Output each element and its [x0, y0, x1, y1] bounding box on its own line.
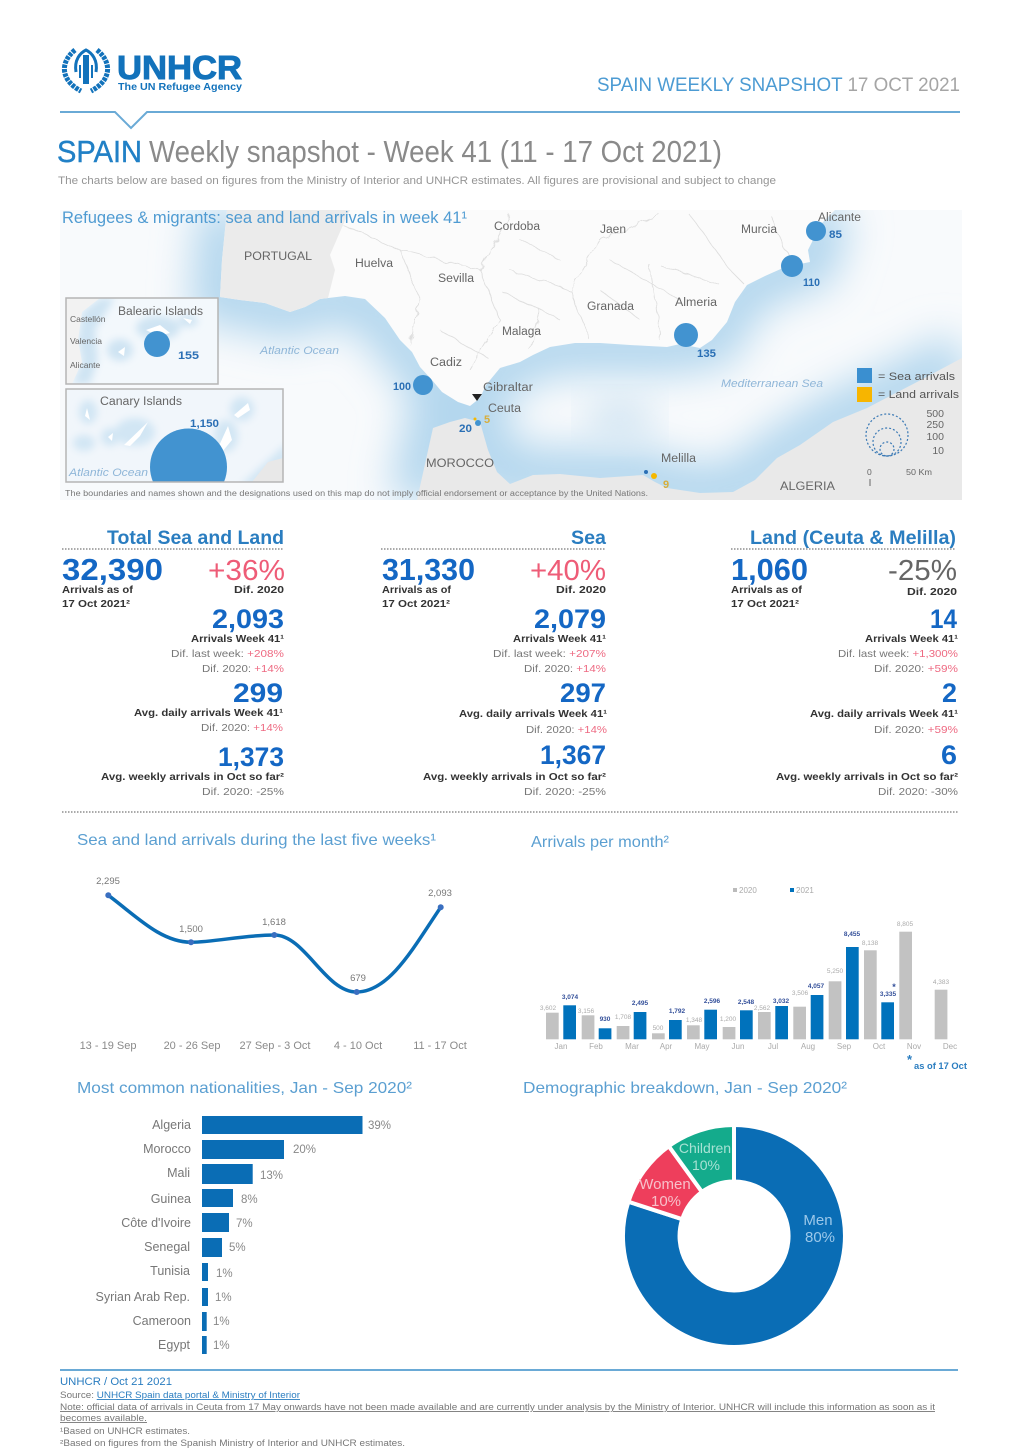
bubble: Canary Islands — [150, 428, 227, 482]
panel: total sea and land — [62, 528, 285, 798]
heading: total: Total Sea and Land — [107, 528, 284, 549]
map labels: ALGERIA — [780, 481, 835, 493]
map labels: PORTUGAL — [244, 251, 313, 263]
values 2021: 3,074 — [562, 994, 579, 1001]
note: as of 17 Oct: * — [907, 1052, 913, 1067]
North Africa land — [417, 358, 962, 500]
donut segment: children: Children — [679, 1140, 731, 1156]
horizontal bars — [202, 1116, 362, 1354]
line axis labels: 13 - 19 Sep — [80, 1040, 136, 1052]
panel: total sea and land: Dif. 2020: +14% — [201, 722, 283, 734]
map labels: Sevilla — [438, 273, 475, 285]
panel: sea: Dif. last week: +207% — [493, 648, 606, 660]
panel: total sea and land: Arrivals Week 41¹ — [191, 633, 285, 645]
month labels: Aug — [801, 1042, 815, 1051]
stat: land difference: -25% — [888, 555, 957, 587]
map labels: Malaga — [502, 326, 542, 338]
stat: land daily average: 2 — [942, 678, 957, 708]
country labels: Algeria — [152, 1118, 191, 1132]
values 2020: 500 — [653, 1025, 664, 1032]
inset: Balearic Islands: Valencia — [70, 336, 102, 346]
map labels: Murcia — [741, 224, 778, 236]
values 2021: 2,596 — [704, 998, 721, 1005]
month labels: Jun — [732, 1042, 744, 1051]
panel: land: Avg. daily arrivals Week 41¹ — [810, 708, 959, 720]
map scale — [867, 469, 932, 486]
header label: SPAIN WEEKLY SNAPSHOT 17 OCT 2021 — [597, 75, 960, 96]
inset: Canary Islands: Atlantic Ocean — [68, 467, 148, 479]
month labels: May — [694, 1042, 710, 1051]
donut segment: children — [669, 1125, 734, 1192]
footer notes: becomes available. — [60, 1413, 147, 1423]
country labels — [96, 1118, 191, 1352]
heading: demographics: Demographic breakdown, Jan - Sep 2020² — [523, 1080, 848, 1097]
panel: land — [731, 528, 959, 798]
bubble: Balearic — [144, 331, 170, 357]
donut segment: men: Men — [803, 1212, 833, 1229]
values 2021 — [562, 931, 897, 1023]
panel: demographic donut — [523, 1080, 848, 1347]
icon: UNHCR emblem — [64, 50, 108, 91]
map legend: 10 — [932, 445, 944, 457]
month labels: Apr — [660, 1042, 673, 1051]
stat: sea daily average: 297 — [560, 678, 606, 708]
stat: land week arrivals: 14 — [930, 604, 957, 634]
panel: sea: Avg. weekly arrivals in Oct so far² — [423, 771, 607, 783]
values 2020 — [540, 921, 950, 1032]
panel: total sea and land: Dif. 2020 — [234, 584, 284, 596]
line value labels: 2,093 — [428, 888, 452, 899]
map legend: = Land arrivals — [878, 389, 960, 401]
panel: sea: Arrivals Week 41¹ — [513, 633, 607, 645]
panel: total sea and land: Dif. 2020: -25% — [202, 786, 284, 798]
map labels: Granada — [587, 301, 635, 313]
panel: land: Dif. 2020 — [907, 586, 957, 598]
values 2021: 1,792 — [669, 1008, 686, 1015]
line value labels: 1,618 — [262, 917, 286, 928]
donut segment: children: 10% — [692, 1157, 720, 1173]
bubbles on mainland — [393, 221, 842, 491]
header logo: UNHCR — [64, 49, 242, 93]
month labels: Jan — [555, 1042, 567, 1051]
values 2021: 2,495 — [632, 1000, 649, 1007]
panel: sea: Dif. 2020: -25% — [524, 786, 606, 798]
map scale: 50 Km — [906, 467, 932, 477]
map legend: = Sea arrivals — [878, 371, 956, 383]
percentage labels — [213, 1120, 391, 1352]
heading: per month: Arrivals per month² — [531, 834, 670, 851]
line value labels: 2,295 — [96, 876, 120, 887]
map labels: Melilla — [661, 453, 697, 465]
panel: sea: Dif. 2020: +14% — [526, 724, 607, 736]
values 2021: 930 — [600, 1016, 611, 1023]
inset: Balearic Islands — [66, 298, 218, 384]
donut segment: men: 80% — [805, 1229, 835, 1246]
country labels: Mali — [167, 1166, 190, 1180]
panel: sea: Dif. 2020: +14% — [524, 663, 606, 675]
footer credit: UNHCR / Oct 21 2021 — [60, 1376, 172, 1388]
panel: land: 17 Oct 2021² — [731, 598, 800, 610]
inset: Balearic Islands: Castellón — [70, 314, 106, 324]
footnote 1: ¹Based on UNHCR estimates. — [60, 1426, 190, 1436]
logo tagline: The UN Refugee Agency — [118, 81, 242, 93]
map labels: Huelva — [355, 258, 394, 270]
inset: Canary Islands: Canary Islands — [100, 396, 182, 408]
map disclaimer: The boundaries and names shown and the designations used on this map do not imply official endorsement or acceptance by the United Nations. — [65, 489, 648, 498]
percentage labels: 1% — [213, 1316, 230, 1328]
map heading: Refugees & migrants: sea and land arrivals in week 41¹ — [62, 209, 467, 227]
bars 2020 — [546, 932, 947, 1039]
percentage labels: 13% — [260, 1170, 283, 1182]
inset: Balearic Islands: Alicante — [70, 360, 101, 370]
map labels: Atlantic Ocean — [259, 345, 339, 357]
donut segment: men — [623, 1125, 845, 1347]
donut segment: women: 10% — [651, 1193, 681, 1210]
values 2021: 3,335 — [880, 991, 897, 998]
title: SPAIN — [57, 134, 142, 169]
inset: Canary Islands: 1,150 — [190, 418, 219, 430]
stat: total daily average: 299 — [233, 678, 283, 708]
heading: five weeks: Sea and land arrivals during the last five weeks¹ — [77, 832, 436, 849]
map labels: MOROCCO — [426, 458, 494, 470]
country labels: Morocco — [143, 1142, 191, 1156]
country labels: Senegal — [144, 1240, 190, 1254]
values 2021: * — [892, 982, 896, 992]
panel: total sea and land: Avg. weekly arrivals in Oct so far² — [101, 771, 285, 783]
panel: total sea and land: 17 Oct 2021² — [62, 598, 131, 610]
stat: total difference: +36% — [208, 555, 285, 587]
map labels: Cordoba — [494, 221, 541, 233]
values 2021: 4,057 — [808, 983, 825, 990]
values 2020: 1,200 — [720, 1016, 737, 1023]
panel: land: Avg. weekly arrivals in Oct so far² — [776, 771, 959, 783]
panel: nationalities bar chart — [77, 1080, 413, 1354]
logo wordmark: UNHCR — [117, 49, 242, 86]
header rule with notch — [60, 112, 960, 128]
bars 2021 — [563, 947, 894, 1039]
panel: total sea and land: Dif. last week: +208% — [171, 648, 284, 660]
values 2020: 5,250 — [827, 968, 844, 975]
values 2020: 1,708 — [615, 1014, 632, 1021]
panel: total sea and land: Arrivals as of — [62, 584, 134, 596]
month labels: Sep — [837, 1042, 852, 1051]
percentage labels: 1% — [213, 1340, 230, 1352]
month labels: Jul — [768, 1042, 778, 1051]
month labels: Feb — [589, 1042, 603, 1051]
map labels: Alicante — [818, 212, 861, 224]
panel: land: Dif. 2020: -30% — [878, 786, 958, 798]
map labels: Gibraltar — [483, 382, 533, 394]
note: as of 17 Oct — [907, 1052, 967, 1071]
panel: five week line chart — [77, 832, 467, 1052]
footnote 2: ²Based on figures from the Spanish Ministry of Interior and UNHCR estimates. — [60, 1438, 405, 1448]
panel: total sea and land: Dif. 2020: +14% — [202, 663, 284, 675]
map scale: 0 — [867, 467, 872, 477]
percentage labels: 39% — [368, 1120, 391, 1132]
footer notes — [60, 1376, 936, 1448]
map labels: Mediterranean Sea — [721, 378, 823, 390]
percentage labels: 7% — [236, 1218, 253, 1230]
line axis labels: 20 - 26 Sep — [164, 1040, 220, 1052]
percentage labels: 8% — [241, 1194, 258, 1206]
heading: sea: Sea — [571, 528, 606, 549]
heading: nationalities: Most common nationalities, Jan - Sep 2020² — [77, 1080, 413, 1097]
values 2020: 3,156 — [578, 1008, 595, 1015]
map labels: Almeria — [675, 297, 718, 309]
values 2020: 8,805 — [897, 921, 914, 928]
panel: land: Dif. 2020: +59% — [874, 663, 958, 675]
Portugal land — [220, 210, 350, 312]
month legend: 2020 — [739, 886, 757, 895]
values 2020: 1,348 — [686, 1017, 703, 1024]
line value labels: 679 — [350, 973, 366, 984]
panel: sea: Dif. 2020 — [556, 584, 606, 596]
values 2020: 3,602 — [540, 1005, 557, 1012]
footer note: Note: official data of arrivals in Ceuta from 17 May onwards have not been made available and are currently under analysis by the Ministry of Interior. UNHCR will include this information as soon as it — [60, 1402, 936, 1412]
bubbles on mainland: 85 — [829, 229, 842, 241]
values 2020: 4,383 — [933, 979, 950, 986]
map legend: 100 — [926, 431, 944, 443]
month labels: Nov — [907, 1042, 921, 1051]
stat: sea week arrivals: 2,079 — [534, 604, 606, 634]
bubbles on mainland: 100 — [393, 381, 411, 393]
panel: sea: Arrivals as of — [382, 584, 452, 596]
stat: total arrivals: 32,390 — [62, 552, 163, 587]
map labels — [244, 212, 861, 493]
bubbles on mainland: 5 — [484, 414, 490, 426]
map labels: Ceuta — [488, 403, 522, 415]
stat: total weekly average: 1,373 — [218, 742, 284, 772]
bubbles on mainland: 135 — [697, 348, 716, 360]
inset: Balearic Islands: Balearic Islands — [118, 306, 203, 318]
month labels: Oct — [873, 1042, 886, 1051]
country labels: Syrian Arab Rep. — [96, 1290, 190, 1304]
inset: Canary Islands — [65, 388, 284, 483]
month labels — [555, 1042, 957, 1051]
month labels: Dec — [943, 1042, 957, 1051]
panel: sea — [381, 528, 608, 798]
month labels: Mar — [625, 1042, 639, 1051]
stat: sea weekly average: 1,367 — [540, 740, 606, 770]
panel: arrivals per month chart — [531, 834, 967, 1071]
percentage labels: 5% — [229, 1242, 246, 1254]
stat: sea difference: +40% — [530, 555, 606, 587]
subtitle: The charts below are based on figures from the Ministry of Interior and UNHCR estimates. All figures are provisional and subject to change — [58, 175, 776, 187]
map legend — [857, 368, 960, 457]
line axis labels: 4 - 10 Oct — [334, 1040, 382, 1052]
country labels: Côte d'Ivoire — [121, 1216, 191, 1230]
map legend: 500 — [926, 408, 944, 420]
values 2021: 2,548 — [738, 999, 755, 1006]
panel: land: Arrivals Week 41¹ — [865, 633, 959, 645]
panel: sea: 17 Oct 2021² — [382, 598, 451, 610]
percentage labels: 20% — [293, 1144, 316, 1156]
line axis labels — [80, 1040, 467, 1052]
bubbles on mainland: 110 — [803, 277, 820, 289]
values 2021: 8,455 — [844, 931, 861, 938]
panel: land: Arrivals as of — [731, 584, 803, 596]
percentage labels: 1% — [215, 1292, 232, 1304]
country labels: Egypt — [158, 1338, 191, 1352]
panel: land: Dif. 2020: +59% — [874, 724, 958, 736]
panel: map of arrivals — [60, 209, 962, 506]
line value labels: 1,500 — [179, 924, 203, 935]
panel: total sea and land: Avg. daily arrivals Week 41¹ — [134, 707, 284, 719]
values 2020: 8,138 — [862, 940, 879, 947]
month legend: 2021 — [796, 886, 814, 895]
donut segment: women — [628, 1146, 702, 1219]
month legend — [733, 886, 814, 895]
footer source: Source: UNHCR Spain data portal & Ministry of Interior — [60, 1390, 300, 1400]
values 2020: 2,562 — [754, 1005, 771, 1012]
title: Weekly snapshot - Week 41 (11 - 17 Oct 2021) — [149, 134, 722, 169]
country labels: Cameroon — [133, 1314, 191, 1328]
map labels: Jaen — [600, 224, 626, 236]
inset: Balearic Islands: 155 — [178, 350, 199, 362]
line value labels — [96, 876, 452, 984]
donut segment: women: Women — [639, 1176, 691, 1193]
panel: land: Dif. last week: +1,300% — [838, 648, 958, 660]
note: as of 17 Oct: as of 17 Oct — [914, 1061, 967, 1071]
map labels: Cadiz — [430, 357, 462, 369]
Iberian land — [220, 210, 835, 406]
percentage labels: 1% — [216, 1268, 233, 1280]
line axis labels: 11 - 17 Oct — [413, 1040, 467, 1052]
heading: land: Land (Ceuta & Melilla) — [750, 528, 956, 549]
line axis labels: 27 Sep - 3 Oct — [240, 1040, 310, 1052]
stat: total week arrivals: 2,093 — [212, 604, 284, 634]
stat: land arrivals: 1,060 — [731, 552, 808, 587]
values 2020: 3,506 — [792, 990, 809, 997]
stat: sea arrivals: 31,330 — [382, 552, 475, 587]
country labels: Tunisia — [150, 1264, 190, 1278]
country labels: Guinea — [151, 1192, 191, 1206]
values 2021: 3,032 — [773, 998, 790, 1005]
map legend: 250 — [926, 419, 944, 431]
stat: land weekly average: 6 — [941, 740, 957, 770]
bubbles on mainland: 9 — [663, 479, 669, 491]
line series — [105, 892, 444, 995]
panel: sea: Avg. daily arrivals Week 41¹ — [459, 708, 608, 720]
bubbles on mainland: 20 — [459, 423, 472, 435]
